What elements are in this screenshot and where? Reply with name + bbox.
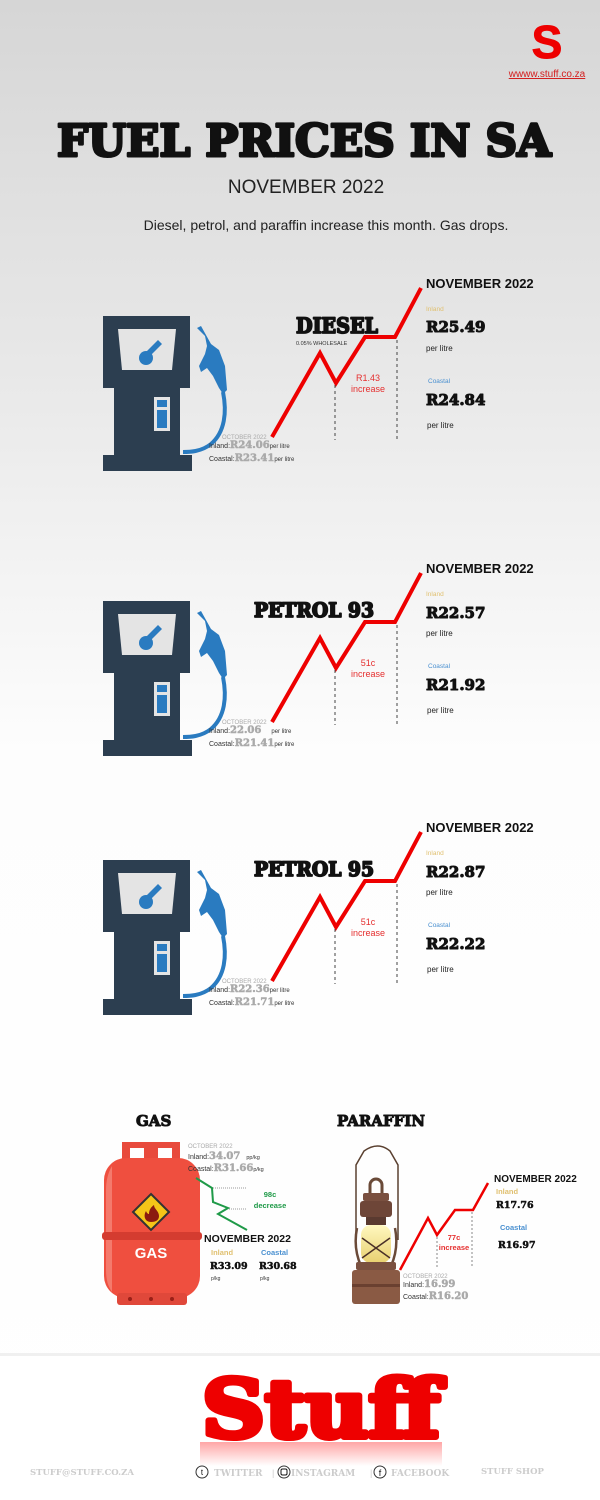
icon: gas cylinder: GAS: [135, 1245, 167, 1262]
line chart: [272, 832, 421, 984]
november prices: Inland: [426, 850, 444, 857]
november prices: Inland: [211, 1248, 234, 1257]
october prices: [188, 1144, 264, 1174]
november prices: R17.76: [496, 1200, 534, 1211]
november prices: Coastal: [428, 378, 451, 385]
footer: [0, 1353, 600, 1500]
icon: fuel pump: [103, 860, 227, 1015]
heading: paraffin: PARAFFIN: [337, 1112, 425, 1130]
panel: petrol 93: [103, 561, 534, 756]
icon: fuel pump: [103, 316, 227, 471]
november prices: per litre: [426, 344, 453, 353]
november prices: p/kg: [211, 1276, 221, 1282]
subtitle: NOVEMBER 2022: [228, 177, 384, 198]
october prices: Coastal:R21.71per litre: [209, 997, 295, 1008]
november prices: R16.97: [498, 1240, 536, 1251]
november prices: NOVEMBER 2022: [204, 1233, 291, 1245]
heading: petrol 93: PETROL 93: [254, 598, 374, 622]
october prices: OCTOBER 2022: [403, 1274, 448, 1280]
footer links: |: [370, 1468, 372, 1478]
november prices: per litre: [427, 706, 454, 715]
november prices: Coastal: [428, 663, 451, 670]
november prices: R22.22: [426, 935, 485, 953]
november prices: per litre: [427, 965, 454, 974]
october prices: Inland:R24.06per litre: [209, 440, 290, 451]
icon: lantern: [352, 1146, 400, 1304]
heading: diesel: DIESEL: [296, 313, 378, 338]
november prices: per litre: [426, 888, 453, 897]
line chart: increase: [351, 669, 385, 679]
footer links: TWITTER: [214, 1469, 263, 1479]
october prices: Inland:34.07 pp/kg: [188, 1151, 260, 1162]
october prices: OCTOBER 2022: [188, 1144, 233, 1150]
november prices: R25.49: [426, 318, 485, 336]
october prices: [209, 435, 295, 464]
title: FUEL PRICES IN SA: [57, 116, 552, 167]
line chart: increase: [351, 928, 385, 938]
line chart: decrease: [196, 1178, 286, 1230]
november prices: per litre: [427, 421, 454, 430]
november prices: Coastal: [500, 1223, 527, 1232]
line chart: R1.43: [356, 373, 380, 383]
october prices: Inland:R22.36per litre: [209, 984, 290, 995]
line chart: decrease: decrease: [254, 1201, 286, 1210]
footer links: f: [379, 1468, 382, 1478]
october prices: [209, 720, 295, 749]
line chart: 51c: [361, 658, 376, 668]
october prices: Inland:22.06 per litre: [209, 725, 292, 736]
november prices: Coastal: [428, 922, 451, 929]
line chart: 51c: [361, 917, 376, 927]
november prices: R33.09: [210, 1261, 248, 1272]
panel: petrol 95: [103, 820, 534, 1015]
november prices: R30.68: [259, 1261, 297, 1272]
october prices: OCTOBER 2022: [222, 435, 267, 441]
logo: Stuff: Stuff: [202, 1362, 445, 1456]
footer links: INSTAGRAM: [291, 1469, 355, 1479]
line chart: [272, 573, 421, 725]
november prices: NOVEMBER 2022: [426, 820, 534, 835]
line chart: [400, 1183, 488, 1270]
november prices: NOVEMBER 2022: [426, 561, 534, 576]
november prices: R24.84: [426, 391, 485, 409]
footer links: |: [272, 1468, 274, 1478]
panel: diesel: [103, 276, 534, 471]
line chart: increase: [439, 1243, 469, 1252]
november prices: R22.87: [426, 863, 485, 881]
november prices: [494, 1174, 577, 1251]
november prices: Inland: [496, 1187, 519, 1196]
line chart: [272, 288, 421, 440]
october prices: Coastal:R23.41per litre: [209, 453, 295, 464]
footer links: FACEBOOK: [391, 1469, 450, 1479]
footer links: [30, 1466, 544, 1479]
panel: paraffin: [337, 1112, 577, 1304]
november prices: [426, 561, 534, 715]
october prices: Coastal:R21.41per litre: [209, 738, 295, 749]
october prices: OCTOBER 2022: [222, 720, 267, 726]
line chart: 77c: [448, 1233, 460, 1242]
november prices: [426, 276, 534, 430]
november prices: Coastal: [261, 1248, 288, 1257]
october prices: Inland:16.99: [403, 1279, 455, 1290]
intro text: Diesel, petrol, and paraffin increase this month. Gas drops.: [144, 217, 508, 233]
logo: S: wwww.stuff.co.za: [508, 69, 586, 80]
november prices: per litre: [426, 629, 453, 638]
icon: fuel pump: [103, 601, 227, 756]
october prices: [209, 979, 295, 1008]
november prices: NOVEMBER 2022: [494, 1174, 577, 1185]
october prices: Coastal:R16.20: [403, 1291, 468, 1302]
october prices: [403, 1274, 468, 1302]
november prices: R22.57: [426, 604, 485, 622]
november prices: [426, 820, 534, 974]
line chart: increase: [351, 384, 385, 394]
heading: petrol 95: PETROL 95: [254, 857, 374, 881]
footer links: STUFF SHOP: [481, 1467, 544, 1477]
november prices: NOVEMBER 2022: [426, 276, 534, 291]
line chart: decrease: 98c: [264, 1190, 276, 1199]
november prices: Inland: [426, 591, 444, 598]
november prices: [204, 1233, 297, 1282]
logo: S: [508, 16, 586, 80]
footer links: t: [201, 1468, 204, 1477]
october prices: OCTOBER 2022: [222, 979, 267, 985]
november prices: Inland: [426, 306, 444, 313]
heading: gas: GAS: [136, 1112, 171, 1130]
november prices: p/kg: [260, 1276, 270, 1282]
icon: gas cylinder: [102, 1142, 202, 1305]
panel: diesel: 0.05% WHOLESALE: [296, 341, 348, 347]
logo: S: S: [532, 16, 562, 68]
november prices: R21.92: [426, 676, 485, 694]
october prices: Coastal:R31.66p/kg: [188, 1163, 264, 1174]
footer links: STUFF@STUFF.CO.ZA: [30, 1468, 134, 1478]
panel: gas: [102, 1112, 297, 1305]
